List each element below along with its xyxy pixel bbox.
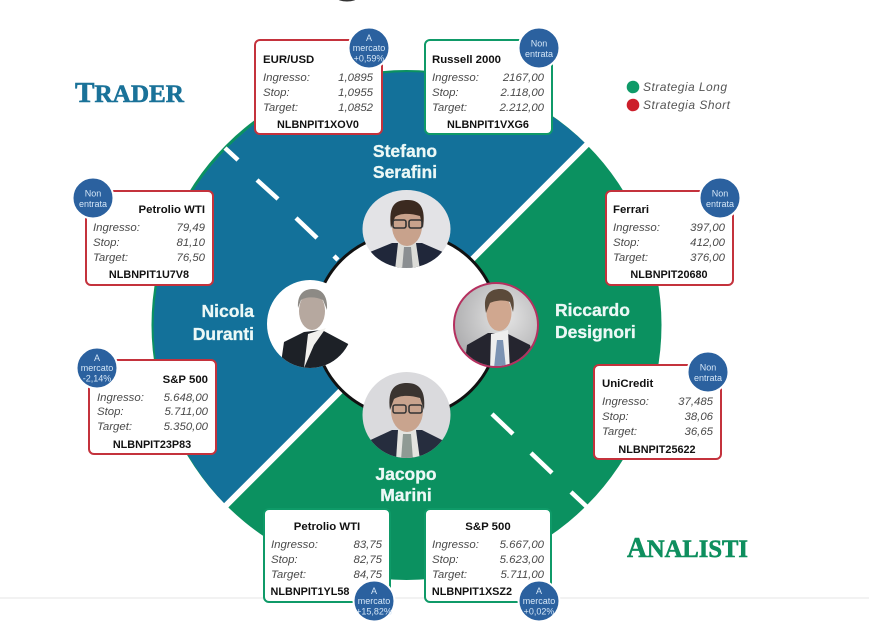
card: Petrolio WTI (Marini): 83,75 [353, 539, 383, 551]
card: UniCredit: Ingresso: [602, 396, 649, 408]
legend [627, 80, 731, 112]
card: EUR/USD: 1,0955 [338, 87, 374, 99]
card: S&P 500 (Marini): 5.667,00 [500, 539, 545, 551]
card: Russell 2000: 2.212,00 [499, 102, 545, 114]
card: S&P 500 (Duranti) [76, 348, 216, 454]
name: Jacopo Marini: Jacopo [375, 464, 437, 484]
card: EUR/USD: 1,0852 [338, 102, 374, 114]
card: Russell 2000: Russell 2000 [432, 54, 501, 66]
badge: a mercato +15,82%: mercato [358, 596, 390, 606]
badge: non entrata: Non [712, 188, 728, 198]
card: EUR/USD: NLBNPIT1XOV0 [277, 119, 359, 131]
card: Petrolio WTI (Marini): Stop: [271, 554, 298, 566]
central circle [314, 233, 498, 417]
card: EUR/USD [255, 28, 390, 134]
card: S&P 500 (Marini) [425, 509, 560, 622]
badge: a mercato +0,02% [518, 580, 560, 622]
badge: non entrata [688, 352, 728, 392]
name: Stefano Serafini: Serafini [373, 162, 437, 182]
badge: a mercato -2,14%: mercato [81, 363, 113, 373]
card: Petrolio WTI (Duranti): Ingresso: [93, 222, 140, 234]
card: S&P 500 (Marini): S&P 500 [465, 521, 511, 533]
badge: a mercato -2,14%: -2,14% [83, 374, 111, 384]
card: Russell 2000: Target: [432, 102, 467, 114]
card: Petrolio WTI (Duranti): Petrolio WTI [139, 204, 205, 216]
card: S&P 500 (Marini): Stop: [432, 554, 459, 566]
name: Nicola Duranti: Duranti [193, 324, 254, 344]
card: Petrolio WTI (Marini): 84,75 [353, 569, 383, 581]
badge: a mercato +0,59%: +0,59% [354, 54, 384, 64]
card: S&P 500 (Duranti): S&P 500 [163, 374, 208, 386]
badge: a mercato +0,59%: mercato [353, 43, 385, 53]
card: Ferrari: Target: [613, 252, 648, 264]
card: UniCredit: 36,65 [684, 426, 714, 438]
legend: long: Strategia Long [643, 80, 727, 94]
card: EUR/USD: Stop: [263, 87, 290, 99]
legend: short: Strategia Short [643, 98, 731, 112]
card: S&P 500 (Duranti): Ingresso: [97, 392, 144, 404]
card: S&P 500 (Duranti): NLBNPIT23P83 [113, 439, 191, 451]
card: Russell 2000: Stop: [432, 87, 459, 99]
card: UniCredit: NLBNPIT25622 [618, 444, 696, 456]
badge: non entrata: entrata [694, 373, 722, 383]
card: Ferrari: NLBNPIT20680 [630, 269, 708, 281]
trader sector [154, 72, 587, 505]
card: UniCredit: Target: [602, 426, 637, 438]
badge: non entrata: entrata [525, 49, 553, 59]
card: Ferrari: 376,00 [690, 252, 726, 264]
card: Petrolio WTI (Marini) [264, 509, 394, 622]
badge: non entrata [518, 28, 560, 68]
card: UniCredit: 37,485 [678, 396, 714, 408]
card: S&P 500 (Marini): 5.623,00 [500, 554, 545, 566]
wheel: trader and analyst sectors [152, 70, 662, 580]
name: Riccardo Designori: Riccardo [555, 300, 630, 320]
card: S&P 500 (Marini): NLBNPIT1XSZ2 [432, 586, 512, 598]
badge: a mercato -2,14% [76, 348, 118, 388]
card: Petrolio WTI (Marini): Petrolio WTI [294, 521, 360, 533]
card: UniCredit: UniCredit [602, 378, 653, 390]
photo: Jacopo Marini [362, 372, 450, 458]
card: S&P 500 (Marini): 5.711,00 [500, 569, 545, 581]
photo: Stefano Serafini [362, 190, 450, 268]
card: Petrolio WTI (Duranti) [72, 178, 213, 285]
title: Analisti: ANALISTI [627, 533, 748, 564]
card: Russell 2000: 2.118,00 [500, 87, 545, 99]
card: S&P 500 (Duranti): 5.350,00 [164, 421, 209, 433]
card: Petrolio WTI (Marini): NLBNPIT1YL58 [271, 586, 349, 598]
badge: non entrata [700, 178, 740, 218]
badge: non entrata [72, 178, 114, 218]
badge: a mercato +0,59%: A [366, 33, 372, 43]
name: Jacopo Marini: Marini [380, 485, 432, 505]
card: Ferrari [606, 178, 740, 285]
badge: non entrata: Non [85, 188, 101, 198]
card: UniCredit [594, 352, 728, 459]
badge: a mercato +0,02%: mercato [523, 596, 555, 606]
card: Ferrari: Ingresso: [613, 222, 660, 234]
badge: a mercato +0,59% [348, 28, 390, 68]
badge: non entrata: entrata [706, 199, 734, 209]
card: S&P 500 (Duranti): 5.648,00 [164, 392, 209, 404]
card: S&P 500 (Duranti): Target: [97, 421, 132, 433]
card: Petrolio WTI (Duranti): Target: [93, 252, 128, 264]
card: Petrolio WTI (Duranti): NLBNPIT1U7V8 [109, 269, 189, 281]
card: S&P 500 (Marini): Target: [432, 569, 467, 581]
title: Trader: TRADER [75, 77, 185, 109]
card: EUR/USD: 1,0895 [338, 72, 374, 84]
badge: a mercato +15,82%: +15,82% [356, 606, 392, 616]
card: Ferrari: Stop: [613, 237, 640, 249]
name: Riccardo Designori: Designori [555, 322, 636, 342]
card: Ferrari: 412,00 [690, 237, 726, 249]
card: Russell 2000: 2167,00 [502, 72, 545, 84]
card: Ferrari: 397,00 [690, 222, 726, 234]
card: Russell 2000 [425, 28, 560, 134]
badge: non entrata: Non [531, 38, 547, 48]
card: UniCredit: 38,06 [684, 411, 714, 423]
card: UniCredit: Stop: [602, 411, 629, 423]
card: Petrolio WTI (Duranti): Stop: [93, 237, 120, 249]
photo: Riccardo Designori [454, 283, 538, 370]
card: EUR/USD: EUR/USD [263, 54, 314, 66]
card: Russell 2000: Ingresso: [432, 72, 479, 84]
badge: non entrata: Non [700, 362, 716, 372]
card: Petrolio WTI (Marini): Ingresso: [271, 539, 318, 551]
badge: a mercato +0,02%: +0,02% [524, 606, 554, 616]
card: Petrolio WTI (Duranti): 79,49 [176, 222, 206, 234]
card: S&P 500 (Marini): Ingresso: [432, 539, 479, 551]
name: Nicola Duranti: Nicola [201, 301, 254, 321]
card: Petrolio WTI (Marini): 82,75 [353, 554, 383, 566]
card: EUR/USD: Ingresso: [263, 72, 310, 84]
card: Ferrari: Ferrari [613, 204, 649, 216]
badge: a mercato +15,82% [354, 580, 394, 622]
card: S&P 500 (Duranti): Stop: [97, 406, 124, 418]
name: Stefano Serafini: Stefano [373, 141, 437, 161]
card: Petrolio WTI (Marini): Target: [271, 569, 306, 581]
analyst sector [152, 70, 662, 580]
card: Petrolio WTI (Duranti): 81,10 [176, 237, 206, 249]
card: EUR/USD: Target: [263, 102, 298, 114]
card: S&P 500 (Duranti): 5.711,00 [164, 406, 209, 418]
card: Petrolio WTI (Duranti): 76,50 [176, 252, 206, 264]
badge: a mercato +0,02%: A [536, 586, 542, 596]
badge: non entrata: entrata [79, 199, 107, 209]
photo: Nicola Duranti [267, 280, 348, 368]
badge: a mercato -2,14%: A [94, 353, 100, 363]
badge: a mercato +15,82%: A [371, 586, 377, 596]
card: Russell 2000: NLBNPIT1VXG6 [447, 119, 529, 131]
